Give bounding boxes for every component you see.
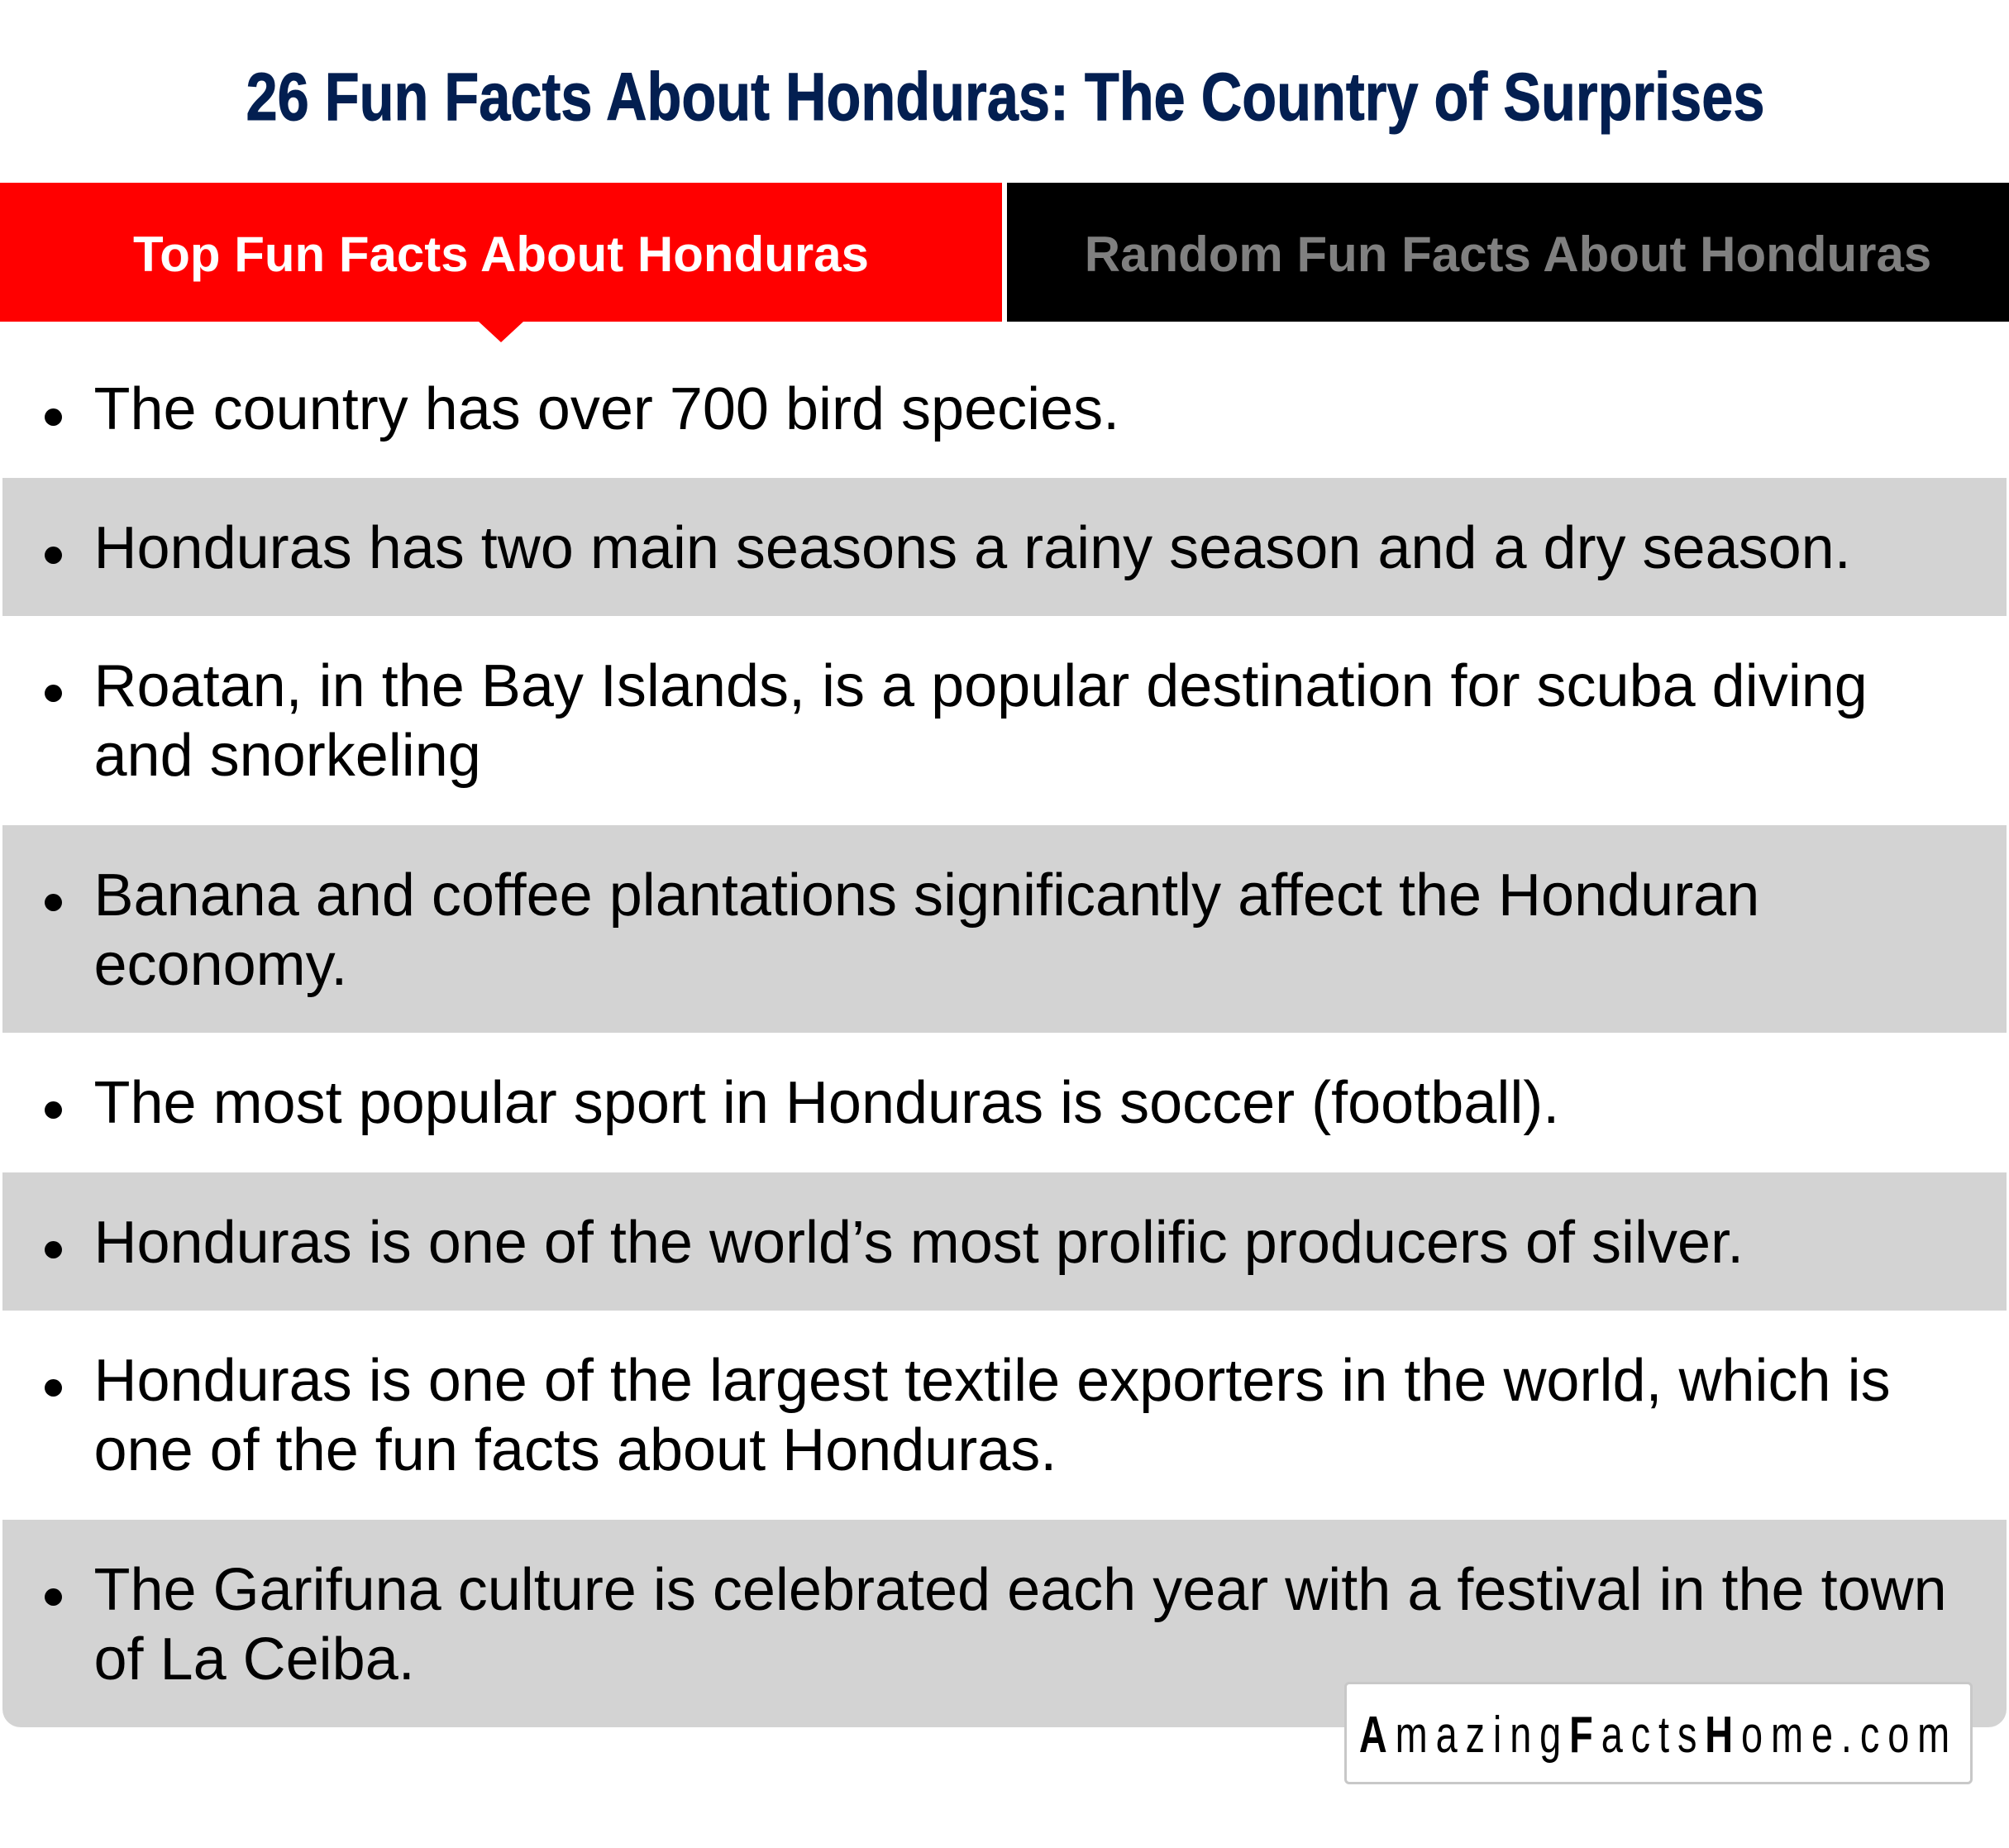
fact row 6 [2, 1172, 2007, 1311]
watermark [1344, 1682, 1973, 1784]
fact row 7: Honduras is one of the largest textile exporters in the world, which is one of the fun facts about Honduras. [94, 1348, 1891, 1483]
tab: random fun facts (inactive): Random Fun Facts About Honduras [1085, 227, 1931, 282]
fact row 4: Banana and coffee plantations significantly affect the Honduran economy. [94, 862, 1759, 998]
fact row 2: Honduras has two main seasons a rainy season and a dry season. [94, 515, 1851, 581]
fact row 4 [2, 825, 2007, 1033]
tab: top fun facts (active): Top Fun Facts About Honduras [133, 227, 869, 282]
watermark: AmazingFactsHome.com [1358, 1706, 1958, 1764]
fact row 6: Honduras is one of the world’s most prolific producers of silver. [94, 1210, 1744, 1276]
tab pointer arrow [479, 322, 523, 342]
fact row 3: Roatan, in the Bay Islands, is a popular destination for scuba diving and snorkeling [94, 653, 1868, 789]
title: 26 Fun Facts About Honduras: The Country of Surprises [246, 60, 1765, 135]
fact row 8 [2, 1520, 2007, 1727]
tab: top fun facts (active) [0, 183, 1002, 322]
fact row 8: The Garifuna culture is celebrated each year with a festival in the town of La Ceiba. [94, 1557, 1947, 1693]
fact row 2 [2, 478, 2007, 616]
fact row 1: The country has over 700 bird species. [94, 376, 1119, 442]
fact row 5: The most popular sport in Honduras is soccer (football). [94, 1070, 1559, 1136]
tab: random fun facts (inactive) [1007, 183, 2009, 322]
